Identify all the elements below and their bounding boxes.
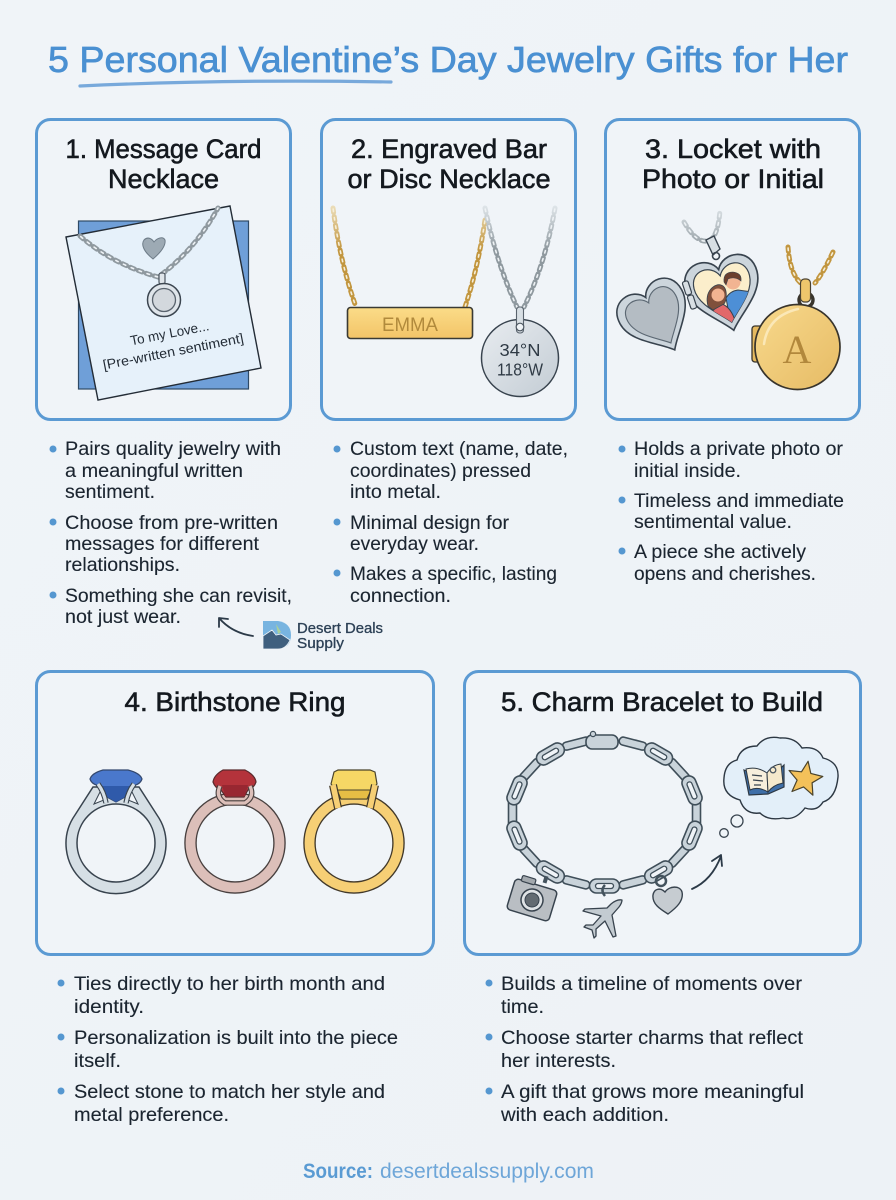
bullets: engraved necklace: Custom text (name, date, xyxy=(350,438,568,460)
bullets: locket: Timeless and immediate xyxy=(634,490,844,512)
bullets: message card necklace: sentiment. xyxy=(65,481,155,503)
bullets: engraved necklace: coordinates) pressed xyxy=(350,460,531,482)
heading: engraved necklace: or Disc Necklace xyxy=(348,164,550,194)
illustration: card and necklace: [Pre-written sentiment] xyxy=(102,331,245,373)
heading: locket xyxy=(642,134,824,194)
illustration: gold bar necklace xyxy=(333,208,485,338)
bullets: message card necklace: Something she can revisit, xyxy=(65,585,292,607)
charm: heart xyxy=(653,876,682,914)
heading: birthstone ring: 4. Birthstone Ring xyxy=(124,687,346,717)
bullets: birthstone ring xyxy=(58,973,398,1126)
bullets: engraved necklace xyxy=(334,438,568,607)
bullets: charm bracelet xyxy=(486,973,804,1126)
bullets: charm bracelet: A gift that grows more meaningful xyxy=(501,1081,804,1103)
bullets: locket xyxy=(618,438,844,585)
bullets: charm bracelet: with each addition. xyxy=(500,1104,669,1126)
panel: message card necklace xyxy=(36,120,292,628)
bullets: engraved necklace: connection. xyxy=(350,585,451,607)
icon: open book xyxy=(744,764,784,795)
illustration: card and necklace: To my Love... xyxy=(129,318,210,348)
bullets: message card necklace: not just wear. xyxy=(65,606,181,628)
bullets: message card necklace: relationships. xyxy=(65,554,180,576)
arrow: bracelet to thought cloud xyxy=(692,855,722,889)
icon: ruby rose gold ring xyxy=(190,770,280,888)
bullets: birthstone ring: itself. xyxy=(74,1050,121,1072)
title: 5 Personal Valentine’s Day Jewelry Gifts for Her xyxy=(48,39,848,80)
bullets: birthstone ring: identity. xyxy=(74,996,144,1018)
bullets: message card necklace: a meaningful written xyxy=(65,460,243,482)
illustration: silver disc necklace xyxy=(482,208,558,396)
illustration: open heart locket xyxy=(616,211,759,351)
bullets: birthstone ring: Personalization is built into the piece xyxy=(74,1027,398,1049)
bullets: locket: A piece she actively xyxy=(634,541,806,563)
logo: Desert Deals Supply: Desert Deals xyxy=(297,621,383,637)
bullets: engraved necklace: Makes a specific, lasting xyxy=(350,563,557,585)
heading: locket: Photo or Initial xyxy=(642,164,824,194)
illustration: chain bracelet xyxy=(505,731,704,893)
bullets: charm bracelet: time. xyxy=(501,996,544,1018)
bullets: birthstone ring: metal preference. xyxy=(74,1104,229,1126)
bullets: message card necklace xyxy=(50,438,292,628)
bullets: engraved necklace: Minimal design for xyxy=(350,512,510,534)
illustration: card and necklace xyxy=(66,206,261,400)
heading: engraved necklace: 2. Engraved Bar xyxy=(351,134,547,164)
logo: Desert Deals Supply xyxy=(263,621,383,652)
illustration: gold initial locket: A xyxy=(783,327,812,372)
logo: Desert Deals Supply: Supply xyxy=(297,636,345,652)
heading: engraved necklace xyxy=(348,134,550,194)
panel: birthstone ring xyxy=(36,672,434,1126)
bullets: charm bracelet: her interests. xyxy=(501,1050,616,1072)
heading: charm bracelet: 5. Charm Bracelet to Build xyxy=(501,687,823,717)
heading: message card necklace: Necklace xyxy=(108,164,219,194)
illustration: gold initial locket xyxy=(752,247,840,390)
bullets: birthstone ring: Select stone to match her style and xyxy=(74,1081,385,1103)
heading: message card necklace xyxy=(66,134,262,194)
illustration: silver disc necklace: 34°N xyxy=(500,340,540,360)
bullets: locket: opens and cherishes. xyxy=(634,563,816,585)
icon: star xyxy=(789,761,823,795)
panel: charm bracelet to build xyxy=(464,672,860,1126)
bullets: birthstone ring: Ties directly to her birth month and xyxy=(74,973,385,995)
source line: Source: xyxy=(303,1160,373,1183)
charm: airplane xyxy=(583,885,622,938)
bullets: locket: Holds a private photo or xyxy=(634,438,843,460)
bullets: engraved necklace: everyday wear. xyxy=(350,533,479,555)
right half of heart locket with photo xyxy=(680,250,769,339)
bullets: locket: sentimental value. xyxy=(634,511,792,533)
bullets: message card necklace: messages for different xyxy=(65,533,260,555)
panel: engraved bar or disc necklace xyxy=(322,120,576,607)
bullets: charm bracelet: Builds a timeline of moments over xyxy=(501,973,803,995)
bullets: locket: initial inside. xyxy=(634,460,741,482)
panel: locket with photo or initial xyxy=(606,120,860,585)
left half of heart locket xyxy=(610,271,706,367)
callout: arrow pointing to bullet xyxy=(219,618,253,636)
heading: message card necklace: 1. Message Card xyxy=(66,134,262,164)
thought bubble: book and star xyxy=(720,737,838,837)
bullets: message card necklace: Choose from pre-written xyxy=(65,512,278,534)
heading: locket: 3. Locket with xyxy=(645,134,821,164)
icon: sapphire silver ring xyxy=(66,770,166,894)
illustration: gold bar necklace: EMMA xyxy=(382,314,438,336)
bullets: message card necklace: Pairs quality jewelry with xyxy=(65,438,281,460)
charm: camera xyxy=(506,868,561,922)
source line: desertdealssupply.com xyxy=(380,1160,594,1183)
icon: citrine gold ring xyxy=(310,770,398,888)
bullets: engraved necklace: into metal. xyxy=(350,481,441,503)
illustration: silver disc necklace: 118°W xyxy=(497,360,543,380)
bullets: charm bracelet: Choose starter charms that reflect xyxy=(501,1027,804,1049)
photo: couple xyxy=(706,272,748,322)
